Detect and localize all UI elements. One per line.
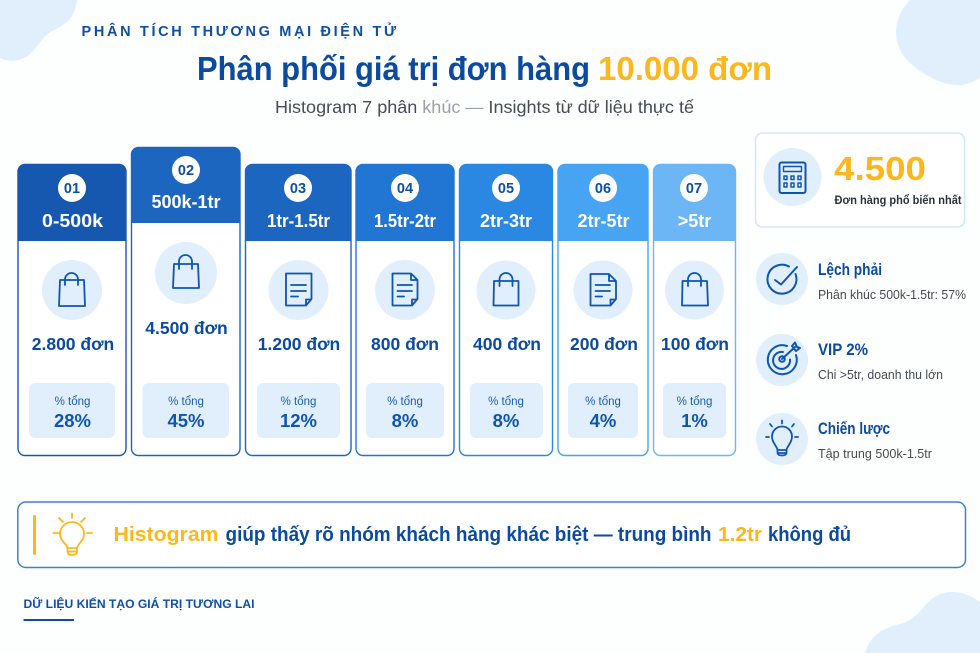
header: segment 03: [245, 164, 352, 241]
icon: shopping bag: [42, 260, 102, 320]
number badge 04: [391, 174, 419, 202]
icon: shopping bag: [155, 242, 217, 304]
share box: % tổng: [387, 396, 423, 408]
share box: 1%: [681, 410, 708, 431]
order count: 800 đơn: [371, 334, 439, 354]
number badge 04: 04: [397, 181, 413, 197]
subtitle: Histogram 7 phân khúc — Insights từ dữ liệu thực tế: [275, 97, 694, 117]
number badge 02: 02: [178, 163, 194, 179]
insight text: Phân khúc 500k-1.5tr: 57%: [818, 288, 966, 302]
range label: 1tr-1.5tr: [267, 211, 330, 231]
callout text: giúp thấy rõ nhóm khách hàng khác biệt — trung bình: [226, 524, 712, 546]
panel: segment 06: [558, 164, 648, 456]
share box: [366, 383, 444, 438]
header: segment 01: [18, 164, 126, 241]
insight: chiến lược: [756, 413, 932, 465]
callout: [18, 502, 966, 568]
insight text: Tập trung 500k-1.5tr: [818, 447, 932, 461]
stat caption: Đơn hàng phổ biến nhất: [834, 193, 962, 207]
header: segment 05: [459, 164, 553, 241]
callout text: không đủ: [768, 524, 851, 546]
insight heading: Chiến lược: [818, 420, 890, 438]
share box: 45%: [167, 410, 205, 431]
insight heading: VIP 2%: [818, 341, 868, 359]
share box: 28%: [54, 410, 91, 431]
accent bar: [33, 515, 36, 555]
blob: top left: [0, 0, 77, 61]
header: segment 07: [653, 164, 736, 241]
panel: key stat: [756, 133, 964, 227]
icon: target: [756, 334, 808, 386]
share box: % tổng: [168, 396, 204, 408]
order count: 400 đơn: [473, 334, 541, 354]
callout text: [114, 524, 851, 546]
share box: [470, 383, 543, 438]
share box: [663, 383, 726, 438]
panel: segment 01: [18, 164, 126, 456]
panel: segment 04: [356, 164, 454, 456]
header: segment 04: [356, 164, 454, 241]
range label: >5tr: [678, 211, 711, 231]
share box: % tổng: [488, 396, 524, 408]
header: segment 06: [558, 164, 648, 241]
icon: shopping bag: [476, 260, 536, 320]
number badge 03: 03: [290, 181, 306, 197]
number badge 01: 01: [64, 181, 80, 197]
number badge 05: [492, 174, 520, 202]
icon: document: [574, 260, 632, 320]
stat value: 4.500: [834, 150, 926, 187]
share box: % tổng: [281, 396, 316, 408]
insight: lệch phải: [756, 253, 966, 305]
order count: 100 đơn: [661, 334, 729, 354]
footer label: DỮ LIỆU KIẾN TẠO GIÁ TRỊ TƯƠNG LAI: [24, 596, 254, 611]
icon: yellow light bulb: [54, 514, 92, 555]
title: 10.000 đơn: [598, 50, 772, 87]
header: segment 02: [131, 148, 240, 223]
range label: 500k-1tr: [151, 192, 221, 212]
share box: 4%: [590, 410, 616, 431]
eyebrow heading: PHÂN TÍCH THƯƠNG MẠI ĐIỆN TỬ: [82, 22, 397, 40]
number badge 05: 05: [498, 181, 514, 197]
icon: shopping bag: [665, 260, 724, 320]
icon: calculator: [764, 148, 822, 206]
panel: segment 03: [245, 164, 352, 456]
number badge 07: [680, 174, 708, 202]
order count: 2.800 đơn: [32, 334, 114, 354]
blob: bottom right: [865, 592, 980, 653]
order count: 1.200 đơn: [258, 334, 340, 354]
share box: 8%: [392, 410, 418, 431]
number badge 06: [589, 174, 617, 202]
insight heading: Lệch phải: [818, 261, 882, 279]
callout text: 1.2tr: [718, 524, 762, 546]
icon: document: [268, 260, 328, 320]
range label: 0-500k: [42, 211, 104, 231]
panel: segment 07: [653, 164, 736, 456]
footer underline: [24, 619, 74, 621]
share box: [29, 383, 115, 438]
range label: 1.5tr-2tr: [374, 211, 436, 231]
share box: [568, 383, 638, 438]
range label: 2tr-3tr: [480, 211, 532, 231]
share box: 12%: [280, 410, 317, 431]
range label: 2tr-5tr: [577, 211, 630, 231]
number badge 02: [172, 156, 200, 184]
order count: 4.500 đơn: [145, 318, 228, 338]
share box: [142, 383, 229, 438]
callout text: Histogram: [114, 524, 218, 546]
icon: check circle: [756, 253, 808, 305]
order count: 200 đơn: [570, 334, 638, 354]
panel: segment 02: [131, 148, 240, 456]
share box: % tổng: [677, 396, 712, 408]
number badge 01: [58, 174, 86, 202]
share box: % tổng: [55, 396, 90, 408]
title: Phân phối giá trị đơn hàng: [197, 50, 590, 87]
icon: light bulb: [756, 413, 808, 465]
share box: 8%: [493, 410, 519, 431]
number badge 06: 06: [595, 181, 611, 197]
insight text: Chi >5tr, doanh thu lớn: [818, 368, 943, 382]
share box: % tổng: [585, 396, 621, 408]
icon: document: [375, 260, 435, 320]
number badge 07: 07: [686, 181, 702, 197]
insight: VIP: [756, 334, 943, 386]
blob: top right: [896, 0, 980, 85]
panel: segment 05: [459, 164, 553, 456]
number badge 03: [284, 174, 312, 202]
share box: [257, 383, 340, 438]
